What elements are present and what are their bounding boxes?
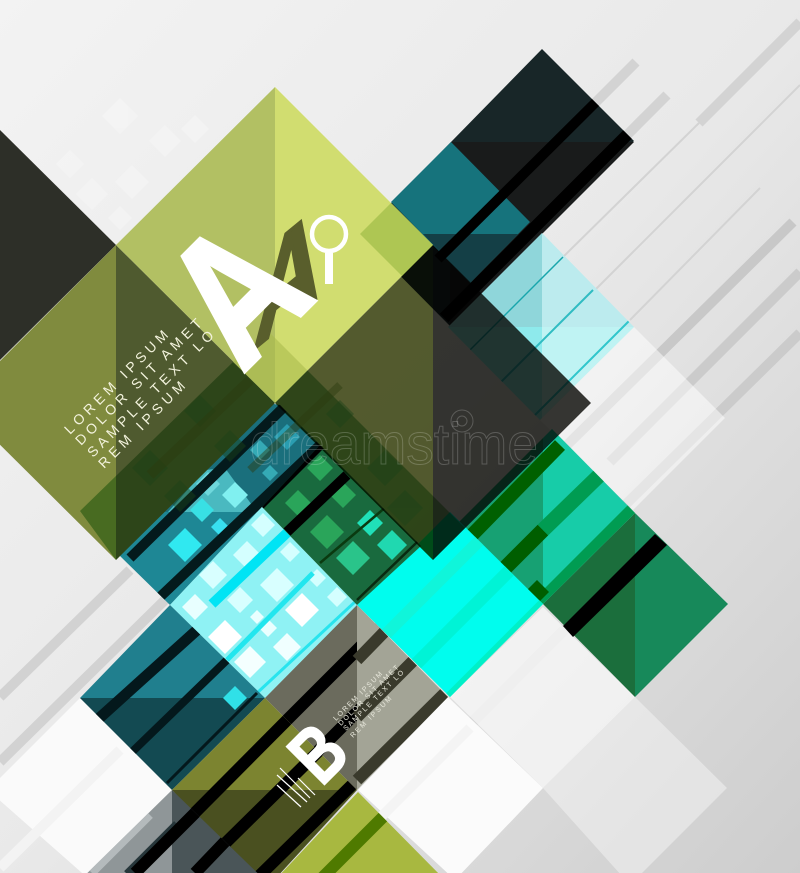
letter B: B: [272, 707, 364, 799]
text block: lorem ipsum upper: DOLOR SIT AMET: [72, 315, 205, 448]
dark green mosaic overlay: [80, 362, 465, 560]
letter A: A: [126, 182, 346, 402]
grey section: [265, 605, 448, 790]
watermark: dreamstime: [250, 412, 538, 477]
lower grey left: [88, 790, 258, 873]
lower teal: [75, 600, 270, 793]
lime corner: [282, 792, 438, 873]
icon: parallel lines: [277, 768, 315, 807]
text block: lorem ipsum upper: REM IPSUM: [95, 378, 188, 471]
lower olive: [172, 698, 357, 873]
bright cyan diamond: [357, 512, 543, 697]
mosaic block: [70, 400, 458, 873]
top green diamond: [116, 87, 433, 403]
text block: lorem ipsum lower: REM IPSUM: [349, 695, 393, 739]
light diamonds lower right: [0, 327, 727, 873]
teal-green band: [460, 429, 635, 604]
text block: lorem ipsum upper: LOREM IPSUM: [61, 327, 171, 437]
shadow of letter A: A: [251, 173, 328, 380]
charcoal triangle left: [0, 130, 116, 360]
dark olive right diamond: [275, 245, 591, 560]
light cyan diamond: [448, 233, 634, 420]
olive left diamond: [0, 245, 275, 560]
right green diamond: [543, 513, 728, 697]
mosaic green: [262, 445, 421, 605]
text block: lorem ipsum upper: SAMPLE TEXT LO: [84, 327, 217, 460]
faint background squares: [56, 98, 209, 230]
text block: lorem ipsum lower: DOLOR SIT AMET: [337, 664, 401, 727]
icon: magnifier: [312, 217, 346, 284]
mosaic cyan white centre: [170, 507, 357, 698]
text block: lorem ipsum lower: LOREM IPSUM: [332, 671, 384, 722]
top dark band: [360, 49, 634, 326]
text block: lorem ipsum lower: SAMPLE TEXT LO: [342, 669, 406, 732]
mosaic teal upper: [120, 404, 324, 605]
